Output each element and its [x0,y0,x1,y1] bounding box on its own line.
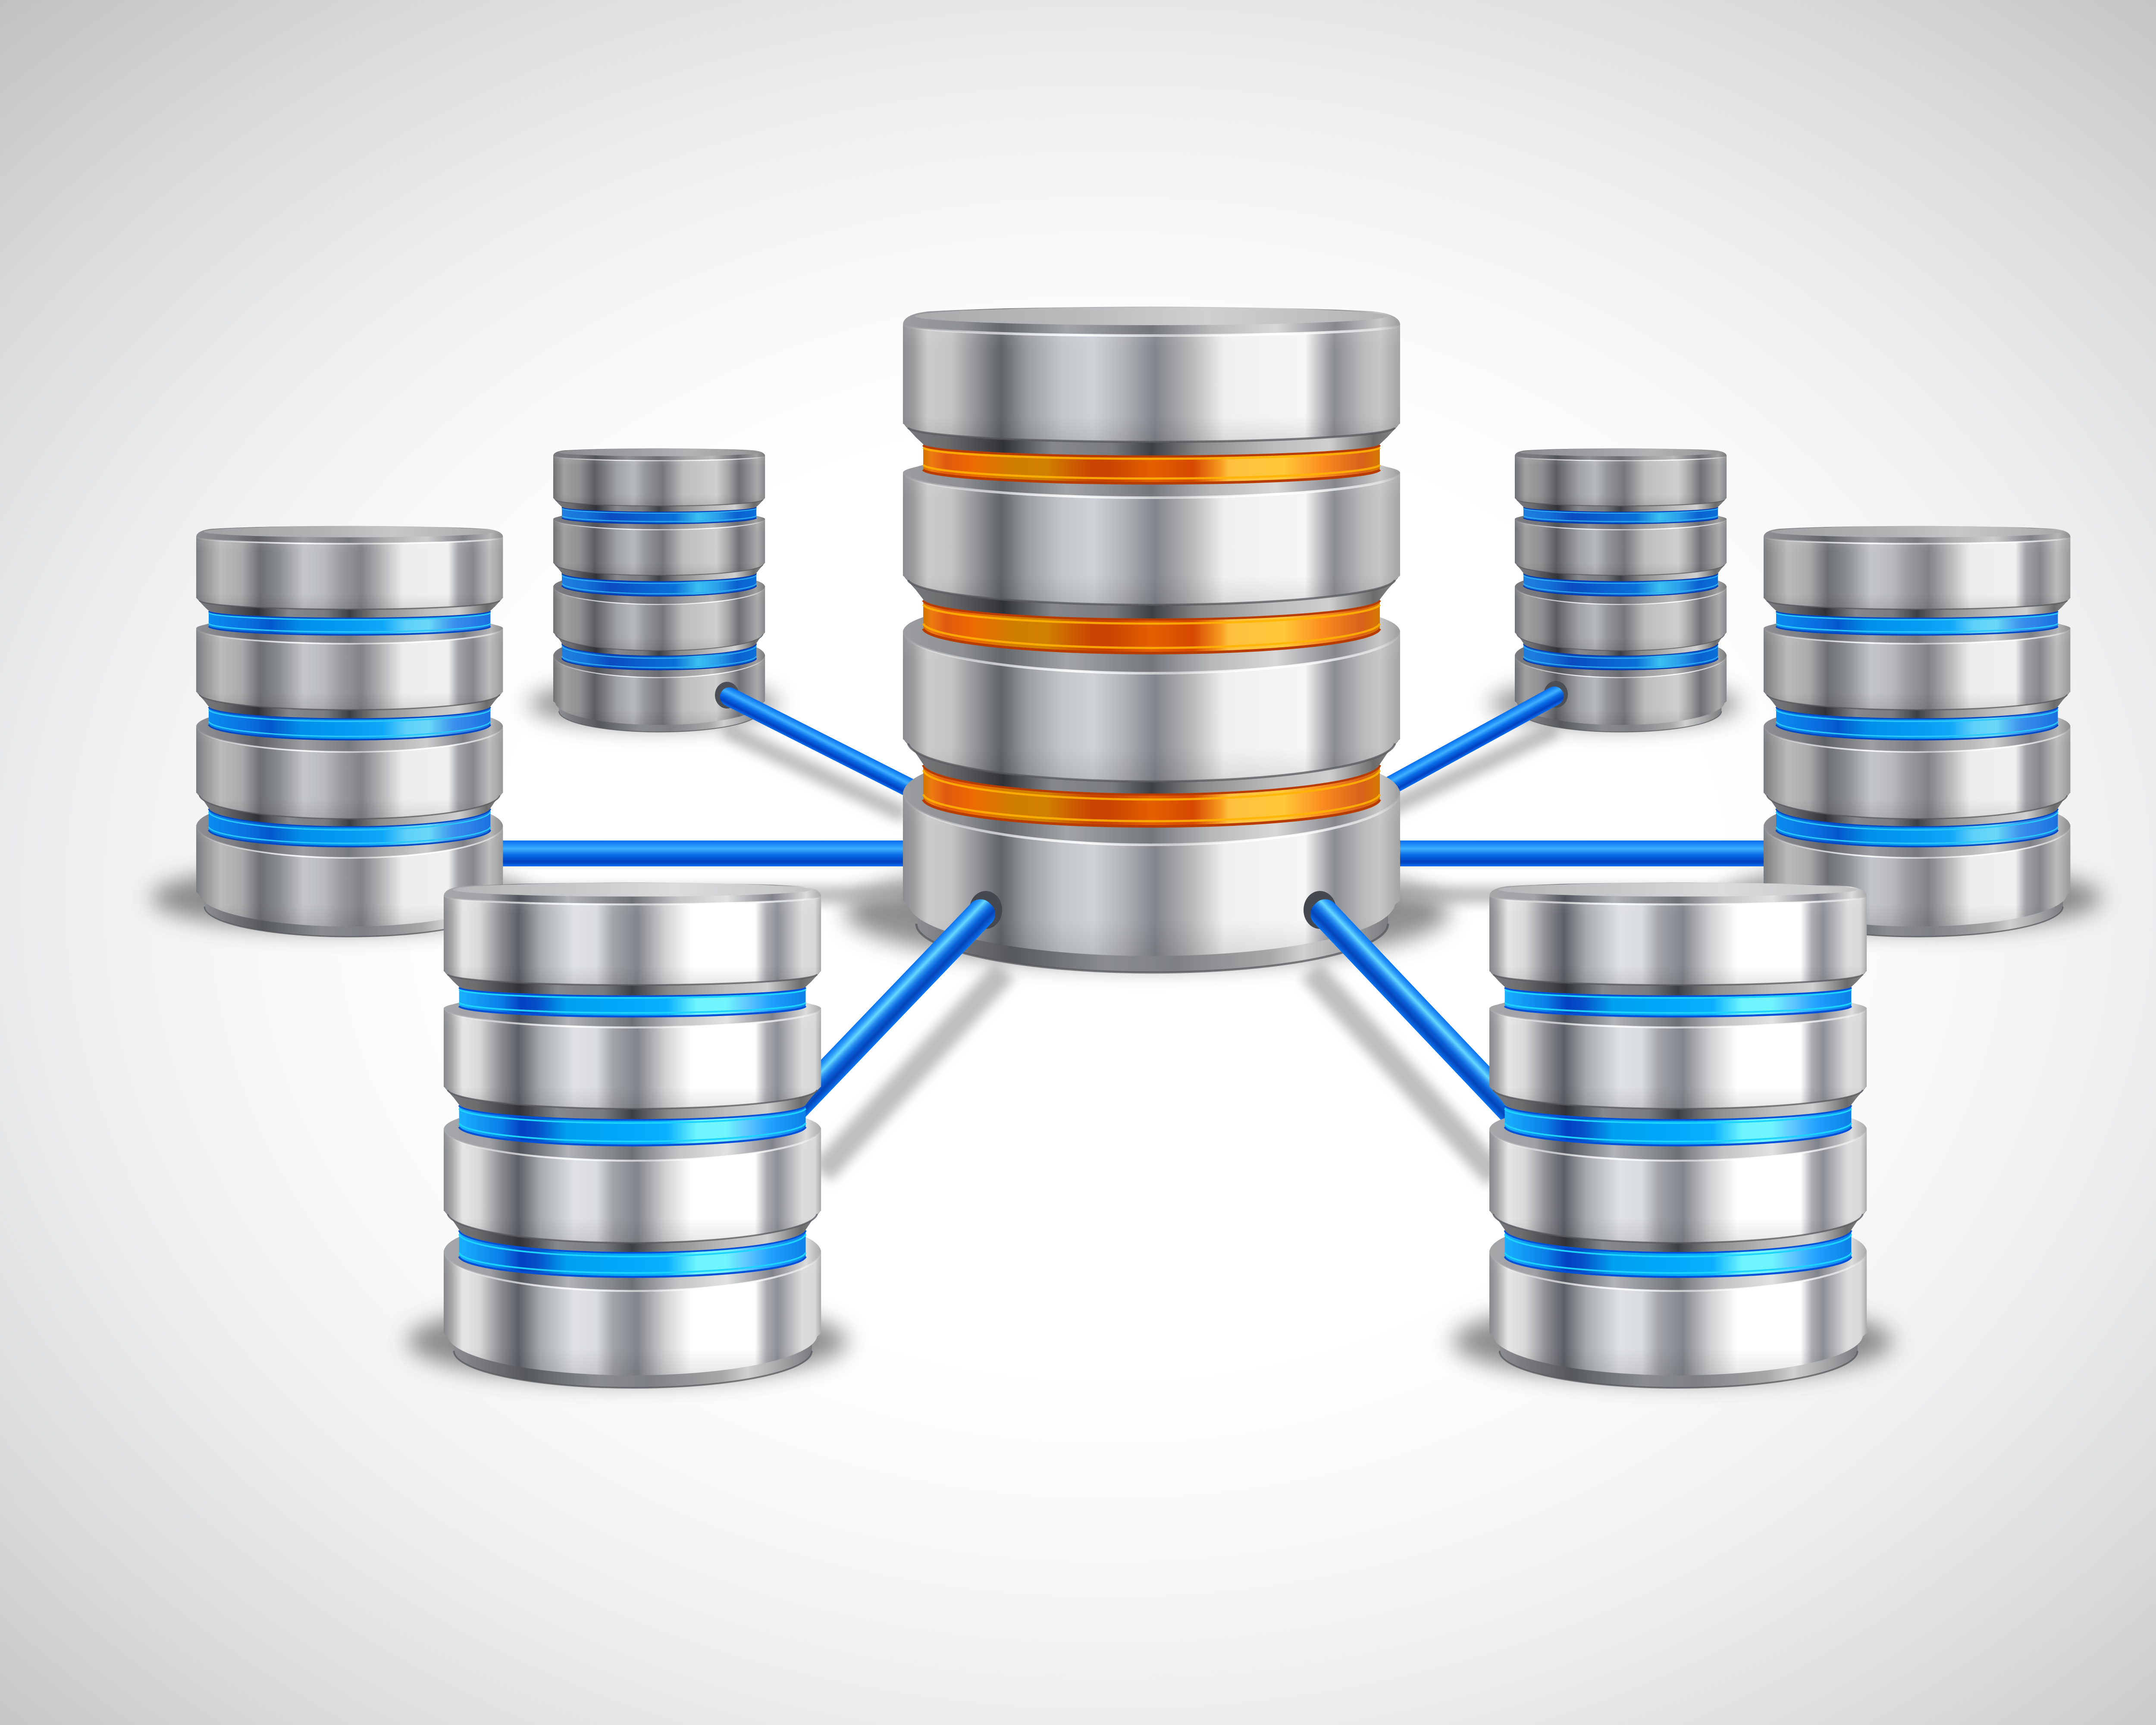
cable: back left small to center [715,682,921,800]
cable: far left to center [496,841,910,866]
database: back left small [553,448,765,732]
cable shadows [503,729,1764,1177]
cable: back right small to center [1376,681,1568,799]
database: front right [1489,883,1867,1388]
database: central hub with orange bands [903,307,1400,972]
cable: center to far right [1393,841,1768,866]
cable: center to front right [1304,891,1539,1139]
database: far left [196,526,503,937]
database: front left [444,883,821,1388]
ground shadows [151,681,2102,1382]
cable: center to front left [765,891,1002,1138]
database: back right small [1515,448,1727,732]
database: far right [1764,526,2070,937]
